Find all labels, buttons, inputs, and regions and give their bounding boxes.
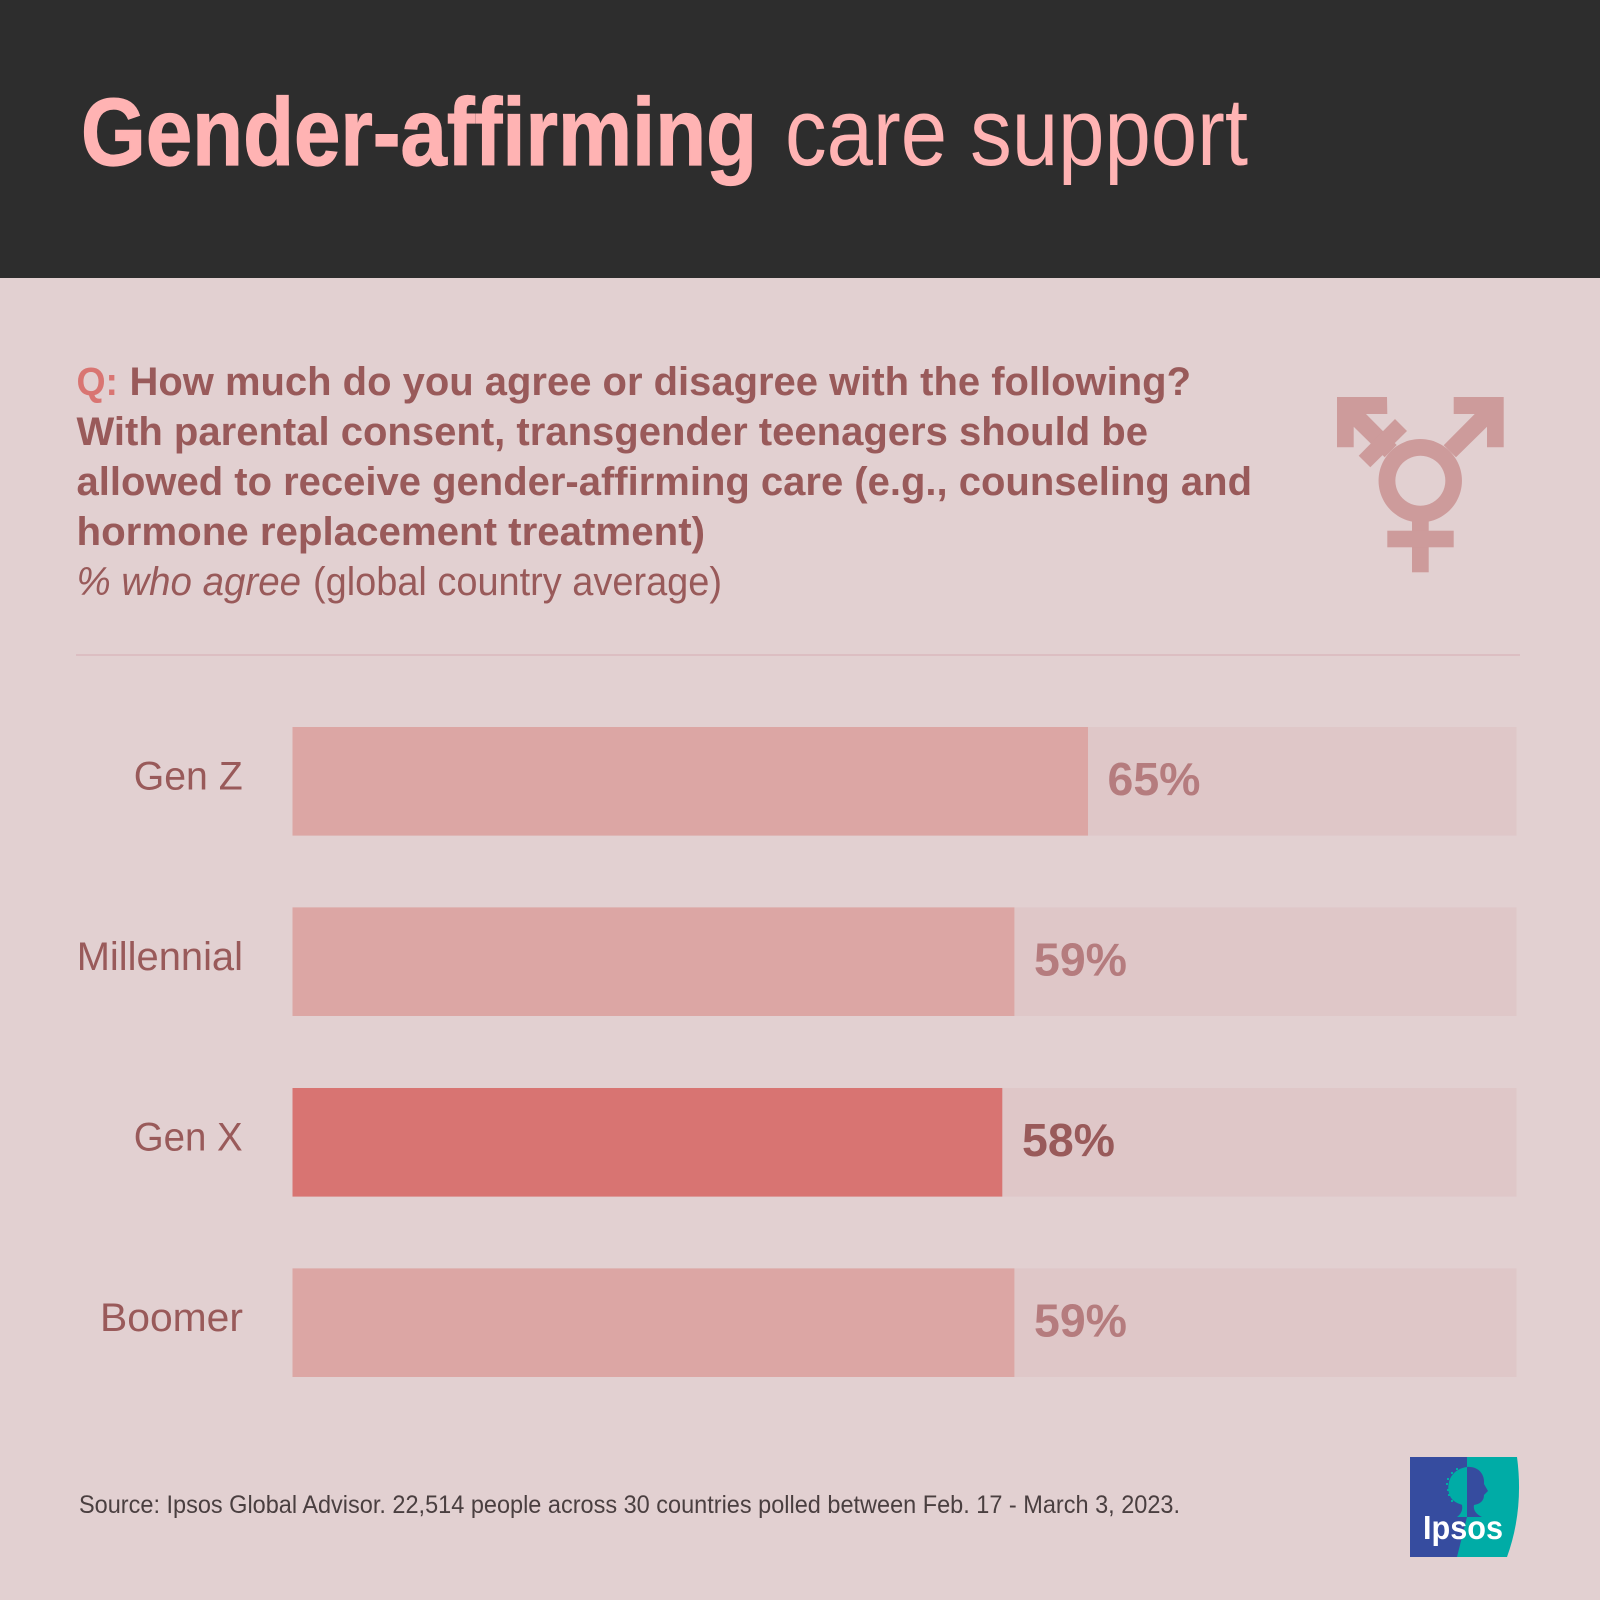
question text block: allowed to receive gender-affirming care (e.g., counseling and	[76, 460, 1252, 504]
question text block: hormone replacement treatment)	[76, 510, 705, 554]
bar row: Gen Z 65%	[134, 727, 1517, 836]
bar row: Boomer 59%: Boomer	[100, 1296, 243, 1340]
bar row: Gen Z 65%: 65%	[1108, 753, 1200, 805]
source note: Source: Ipsos Global Advisor. 22,514 people across 30 countries polled between Feb. 17 - March 3, 2023.	[79, 1491, 1180, 1519]
bar row: Gen Z 65%: Gen Z	[134, 755, 243, 799]
question text block	[76, 360, 1252, 604]
question text block: (global country average)	[313, 560, 722, 604]
bar row: Gen X 58% highlighted: Gen X	[134, 1116, 243, 1160]
icon: transgender symbol	[1337, 397, 1504, 572]
bar row: Millennial 59%	[77, 907, 1517, 1016]
logo: Ipsos	[1410, 1457, 1519, 1557]
bar chart	[77, 727, 1517, 1377]
title: Gender-affirming	[81, 79, 757, 186]
question text block: Q:	[76, 360, 118, 404]
bar row: Gen X 58% highlighted	[134, 1088, 1517, 1197]
bar row: Millennial 59%: Millennial	[77, 935, 243, 979]
title: care support	[785, 79, 1248, 186]
bar row: Boomer 59%: 59%	[1034, 1294, 1127, 1346]
title	[81, 79, 1248, 186]
bar row: Boomer 59%	[100, 1268, 1516, 1377]
divider	[76, 654, 1520, 656]
logo: Ipsos: Ipsos	[1423, 1509, 1503, 1546]
question text block: % who agree	[76, 560, 301, 604]
bar row: Gen X 58% highlighted: 58%	[1022, 1114, 1115, 1166]
question text block: With parental consent, transgender teenagers should be	[76, 410, 1148, 454]
header band	[0, 0, 1600, 278]
question text block: How much do you agree or disagree with the following?	[130, 360, 1191, 404]
bar row: Millennial 59%: 59%	[1034, 933, 1127, 985]
